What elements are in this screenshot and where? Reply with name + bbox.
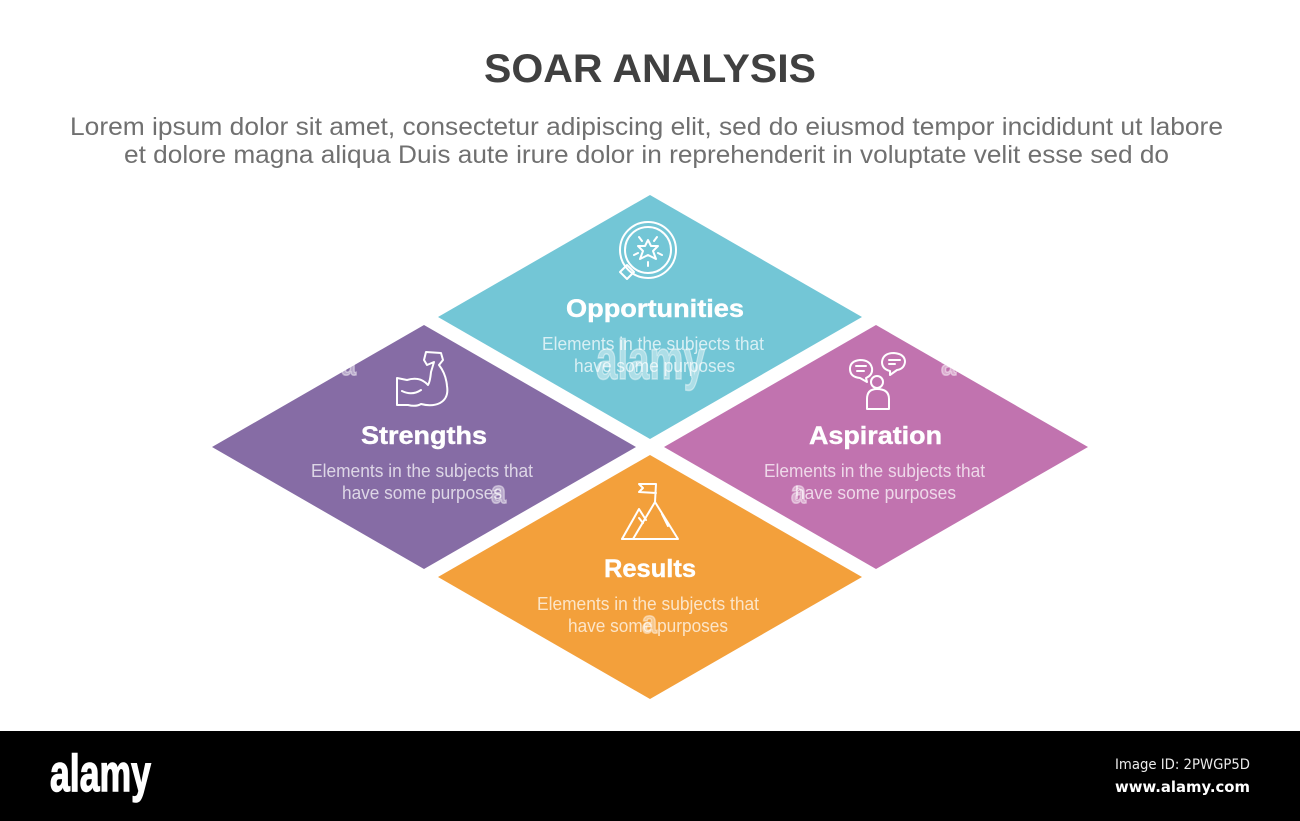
- text: aspiration description: [764, 461, 985, 503]
- text: strengths description: [311, 461, 533, 503]
- text: results description: Elements in the subjects that: [537, 594, 759, 614]
- text: opportunities description: Elements in the subjects that: [542, 334, 764, 354]
- text: strengths description: have some purposes: [342, 483, 502, 503]
- panel: opportunities: [438, 195, 862, 439]
- icon: person with speech bubbles: [850, 353, 905, 409]
- footer image id and url: Image ID: 2PWGP5D: [1115, 757, 1250, 773]
- heading: results: Results: [604, 555, 696, 583]
- watermark letters: a: [491, 474, 506, 510]
- icon: mountain with flag: [622, 484, 678, 539]
- text: opportunities description: have some purposes: [574, 356, 735, 376]
- panel: strengths: [212, 325, 636, 569]
- subtitle text block: Lorem ipsum dolor sit amet, consectetur adipiscing elit, sed do eiusmod tempor incididunt ut labore: [70, 113, 1223, 141]
- panel: aspiration: [664, 325, 1088, 569]
- watermark letters: a: [341, 346, 356, 382]
- watermark letters: a: [642, 604, 657, 640]
- text: opportunities description: [542, 334, 764, 376]
- footer logo: alamy: [50, 745, 151, 803]
- icon: flexed arm: [397, 352, 447, 406]
- watermark letters: [341, 328, 956, 640]
- footer bar: [0, 731, 1300, 821]
- watermark letters: a: [791, 474, 806, 510]
- panel: results: [438, 455, 862, 699]
- text: results description: have some purposes: [568, 616, 728, 636]
- footer image id and url: www.alamy.com: [1115, 778, 1250, 796]
- title: SOAR ANALYSIS: [484, 47, 816, 91]
- heading: opportunities: Opportunities: [566, 295, 744, 323]
- text: aspiration description: have some purposes: [795, 483, 956, 503]
- footer image id and url: [1115, 757, 1250, 796]
- heading: strengths: Strengths: [361, 422, 487, 450]
- heading: aspiration: Aspiration: [809, 422, 942, 450]
- subtitle text block: [70, 113, 1223, 169]
- watermark letters: a: [941, 346, 956, 382]
- text: aspiration description: Elements in the subjects that: [764, 461, 985, 481]
- text: strengths description: Elements in the subjects that: [311, 461, 533, 481]
- text: results description: [537, 594, 759, 636]
- subtitle text block: et dolore magna aliqua Duis aute irure dolor in reprehenderit in voluptate velit esse sed do: [124, 141, 1169, 169]
- icon: magnifier with star: [620, 222, 676, 279]
- watermark letters: alamy: [596, 328, 705, 391]
